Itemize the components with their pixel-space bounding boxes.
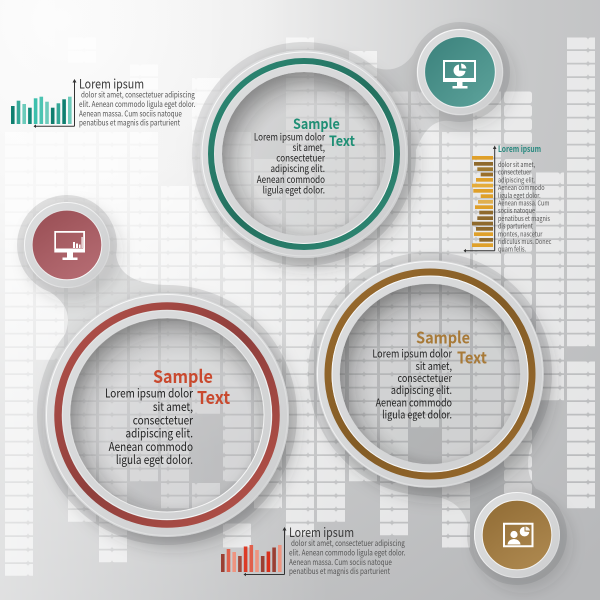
- heading: sample text red: Sample: [153, 363, 213, 388]
- paragraph: bronze circle: adipiscing elit.: [391, 381, 452, 397]
- red circle text: [105, 363, 230, 469]
- paragraph: teal circle: adipiscing elit.: [270, 161, 325, 175]
- paragraph: teal circle: sit amet,: [293, 140, 325, 154]
- note text: elit. Aenean commodo ligula eget dolor.: [79, 99, 195, 110]
- note text: ligula eget dolor.: [498, 190, 541, 200]
- horizontal bar chart: amber: [472, 156, 493, 247]
- chart axes: [464, 147, 495, 251]
- note text: montes, nascetur: [498, 229, 543, 238]
- note text: adipiscing elit.: [498, 175, 535, 185]
- right chart note: [464, 143, 551, 254]
- paragraph: teal circle: Aenean commodo: [257, 172, 325, 186]
- paragraph: red circle: sit amet,: [153, 398, 193, 415]
- note heading: Lorem ipsum: [498, 143, 541, 155]
- heading: sample text teal: Text: [329, 130, 355, 150]
- note text: ridiculus mus. Donec: [498, 236, 551, 246]
- icon: presentation board: [503, 523, 534, 547]
- heading: sample text bronze: Text: [457, 346, 487, 369]
- note heading: Lorem ipsum: [79, 74, 144, 93]
- paragraph: red circle: adipiscing elit.: [126, 425, 193, 442]
- paragraph: red circle: consectetuer: [133, 411, 194, 429]
- note text: penatibus et magnis dis parturient: [79, 118, 180, 129]
- red outer ring: [58, 306, 276, 524]
- heading: sample text red: Text: [197, 384, 230, 409]
- note text: penatibus et magnis dis parturient: [289, 566, 390, 578]
- note heading: Lorem ipsum: [289, 523, 354, 541]
- paragraph: bronze circle: ligula eget dolor.: [382, 405, 452, 422]
- paragraph: teal circle: ligula eget dolor.: [263, 183, 325, 197]
- red icon circle: [24, 202, 110, 288]
- note text: dolor sit amet, consectetuer adipiscing: [291, 538, 405, 550]
- paragraph: bronze circle: sit amet,: [416, 357, 452, 373]
- paragraph: bronze circle: Lorem ipsum dolor: [372, 344, 452, 361]
- paragraph: red circle: ligula eget dolor.: [116, 451, 193, 469]
- bronze band: [328, 272, 532, 476]
- note text: dolor sit amet, consectetuer adipiscing: [81, 90, 195, 101]
- bronze circle text: [372, 326, 487, 422]
- bronze icon circle: [474, 492, 560, 578]
- icon: monitor with pie chart: [443, 60, 476, 88]
- bronze ring circle: [318, 262, 542, 486]
- bronze outer ring: [328, 272, 532, 476]
- note text: penatibus et magnis: [498, 213, 550, 223]
- teal outer ring: [211, 61, 397, 247]
- chart axes: [244, 528, 284, 574]
- chart axes: [34, 80, 74, 126]
- paragraph: red circle: Aenean commodo: [109, 438, 193, 455]
- note text: Aenean massa. Cum: [498, 198, 550, 208]
- bar chart: teal: [11, 97, 72, 124]
- paragraph: bronze circle: Aenean commodo: [376, 393, 452, 410]
- note text: dolor sit amet,: [498, 159, 535, 169]
- bar chart: red: [221, 545, 282, 572]
- note text: quam felis.: [498, 244, 526, 254]
- teal ring circle: [202, 52, 406, 256]
- teal circle text: [254, 113, 355, 197]
- icon: monitor with bar chart: [54, 231, 85, 260]
- note text: Aenean massa. Cum sociis natoque: [79, 109, 182, 120]
- note text: dis parturient: [498, 221, 533, 231]
- red ring circle: [46, 294, 288, 536]
- teal band: [211, 61, 397, 247]
- note text: elit. Aenean commodo ligula eget dolor.: [289, 548, 405, 559]
- note text: consectetuer: [498, 167, 532, 177]
- heading: sample text bronze: Sample: [416, 326, 470, 349]
- paragraph: teal circle: consectetuer: [276, 151, 325, 165]
- red band: [58, 306, 276, 524]
- note text: sociis natoque: [498, 206, 536, 215]
- paragraph: bronze circle: consectetuer: [397, 369, 452, 385]
- note text: Aenean commodo: [498, 182, 545, 192]
- paragraph: teal circle: Lorem ipsum dolor: [254, 130, 325, 144]
- heading: sample text teal: Sample: [293, 113, 340, 133]
- top-left chart note: [11, 74, 195, 129]
- bottom chart note: [221, 523, 405, 578]
- teal icon circle: [418, 30, 502, 114]
- note text: Aenean massa. Cum sociis natoque: [289, 557, 392, 568]
- paragraph: red circle: Lorem ipsum dolor: [105, 384, 194, 402]
